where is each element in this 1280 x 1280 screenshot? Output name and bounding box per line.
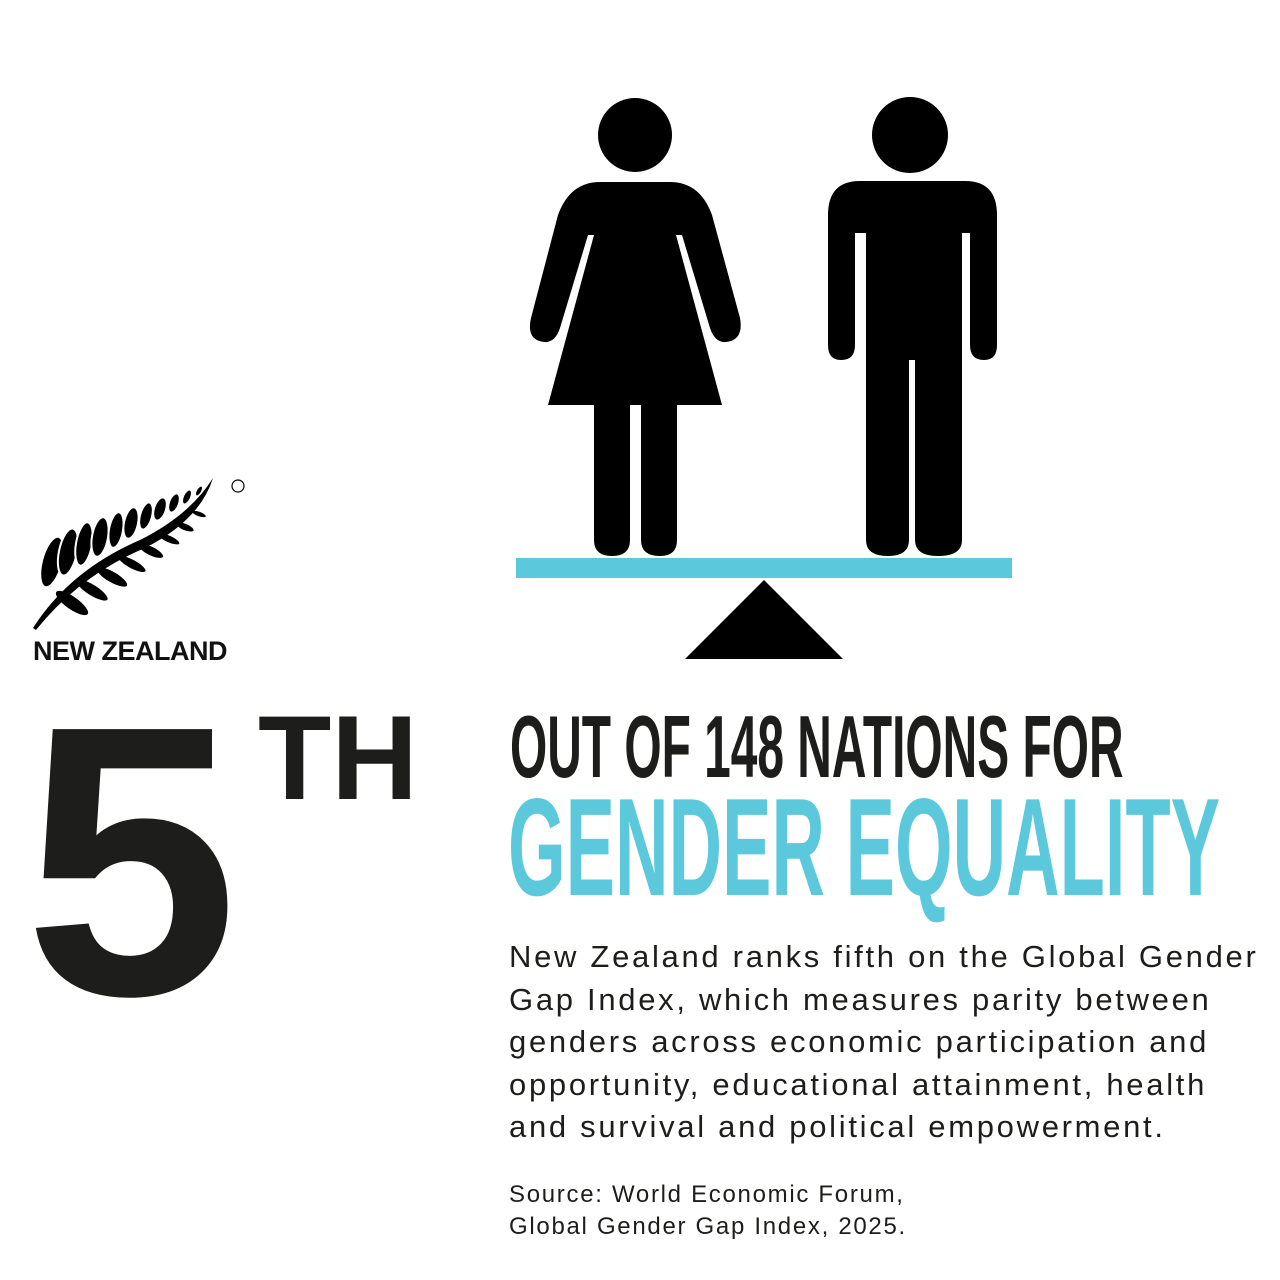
body text: opportunity, educational attainment, health <box>509 1066 1207 1102</box>
source note <box>509 1181 907 1240</box>
superscript TH: TH <box>258 691 418 825</box>
logo text: NEW ZEALAND <box>33 636 227 666</box>
big number 5th <box>24 645 418 1076</box>
illustration: figures on balance <box>516 97 1012 659</box>
icon: man figure <box>828 97 997 556</box>
body text: New Zealand ranks fifth on the Global Gender <box>509 939 1258 974</box>
logo: silver fern New Zealand <box>33 478 245 666</box>
body text: and survival and political empowerment. <box>509 1109 1166 1144</box>
balance beam <box>516 558 1012 578</box>
icon: woman figure <box>530 98 741 556</box>
heading: gender equality: GENDER EQUALITY <box>508 770 1220 925</box>
big number 5th: 5 <box>24 645 238 1076</box>
source note: Source: World Economic Forum, <box>509 1181 905 1208</box>
source note: Global Gender Gap Index, 2025. <box>509 1213 907 1240</box>
heading: out of 148 nations: OUT OF 148 NATIONS FOR <box>510 697 1124 796</box>
body text <box>509 939 1258 1144</box>
fulcrum triangle <box>685 580 843 659</box>
body text: genders across economic participation and <box>509 1024 1209 1059</box>
body text: Gap Index, which measures parity between <box>509 982 1211 1016</box>
